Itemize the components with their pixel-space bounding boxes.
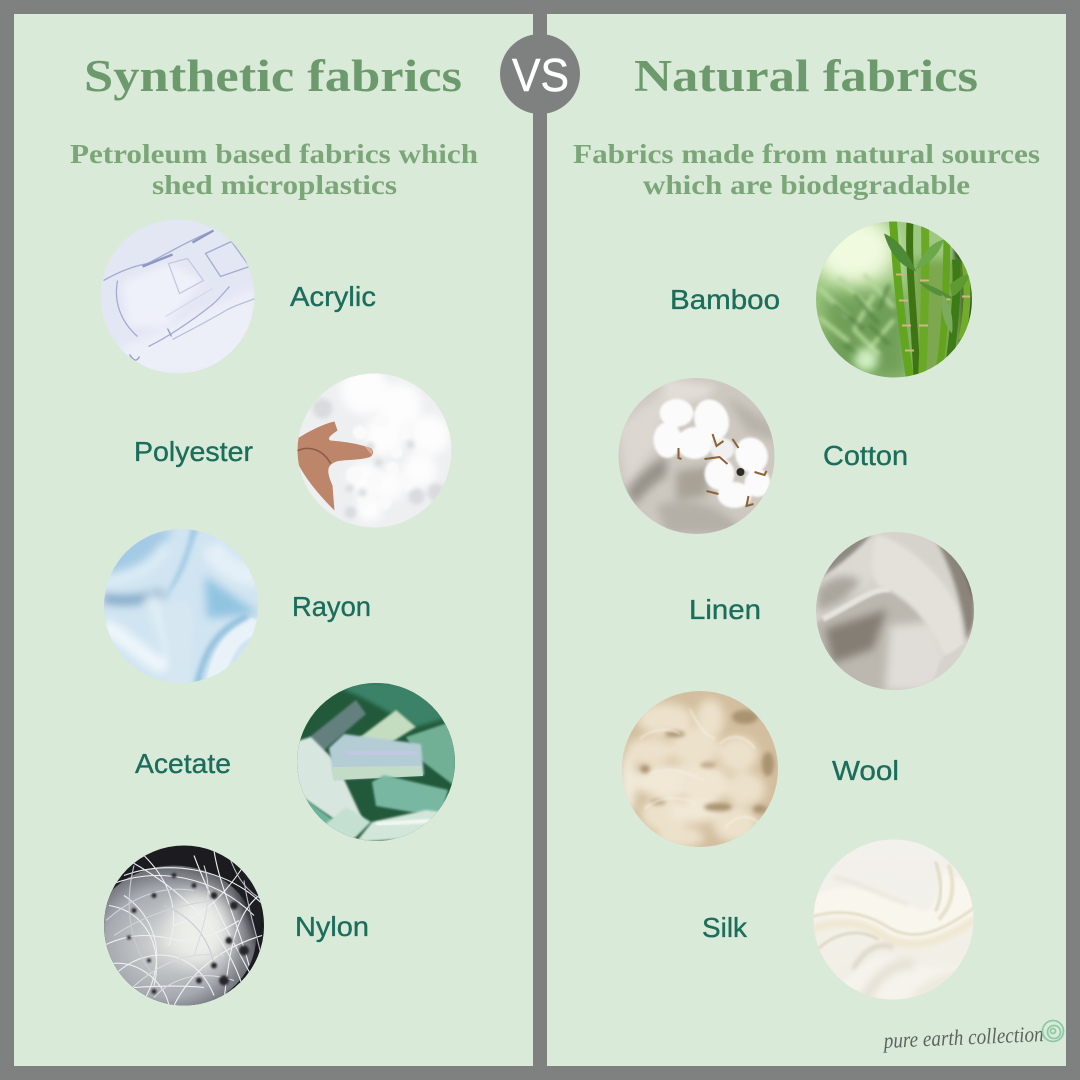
photo: cotton xyxy=(618,377,776,535)
photo: linen xyxy=(815,531,975,691)
photo: wool xyxy=(620,690,779,848)
photo: bamboo xyxy=(812,214,973,380)
panel: natural fabrics xyxy=(547,14,1066,1066)
subheading: synthetic description: shed microplastics xyxy=(152,169,397,200)
photo: silk xyxy=(812,838,974,1000)
photo: rayon xyxy=(103,528,259,684)
heading: synthetic fabrics: Synthetic fabrics xyxy=(84,51,462,101)
subheading: synthetic description: Petroleum based fabrics which xyxy=(70,138,478,169)
label: wool: Wool xyxy=(832,755,899,786)
photo: nylon xyxy=(104,846,264,1006)
label: nylon: Nylon xyxy=(295,911,369,942)
label: rayon: Rayon xyxy=(292,591,371,622)
label: bamboo: Bamboo xyxy=(670,284,780,315)
subheading: natural description: which are biodegradable xyxy=(643,169,970,200)
label: polyester: Polyester xyxy=(134,436,253,467)
badge: VS xyxy=(500,34,580,114)
subheading: natural description xyxy=(573,138,1040,200)
photo: acetate xyxy=(294,682,456,847)
subheading: natural description: Fabrics made from natural sources xyxy=(573,138,1040,169)
label: acetate: Acetate xyxy=(135,748,231,779)
label: silk: Silk xyxy=(702,912,747,943)
subheading: synthetic description xyxy=(70,138,478,200)
heading: natural fabrics: Natural fabrics xyxy=(634,51,978,101)
photo: polyester xyxy=(294,366,452,528)
photo: acrylic xyxy=(100,218,256,374)
badge: VS: VS xyxy=(512,49,569,101)
icon: spiral xyxy=(1042,1020,1064,1042)
label: acrylic: Acrylic xyxy=(290,281,376,312)
logo: pure earth collection: pure earth collection xyxy=(881,1021,1044,1053)
divider: center bar xyxy=(533,0,547,1080)
label: linen: Linen xyxy=(689,594,761,625)
label: cotton: Cotton xyxy=(823,440,908,471)
panel: synthetic fabrics xyxy=(14,14,533,1066)
